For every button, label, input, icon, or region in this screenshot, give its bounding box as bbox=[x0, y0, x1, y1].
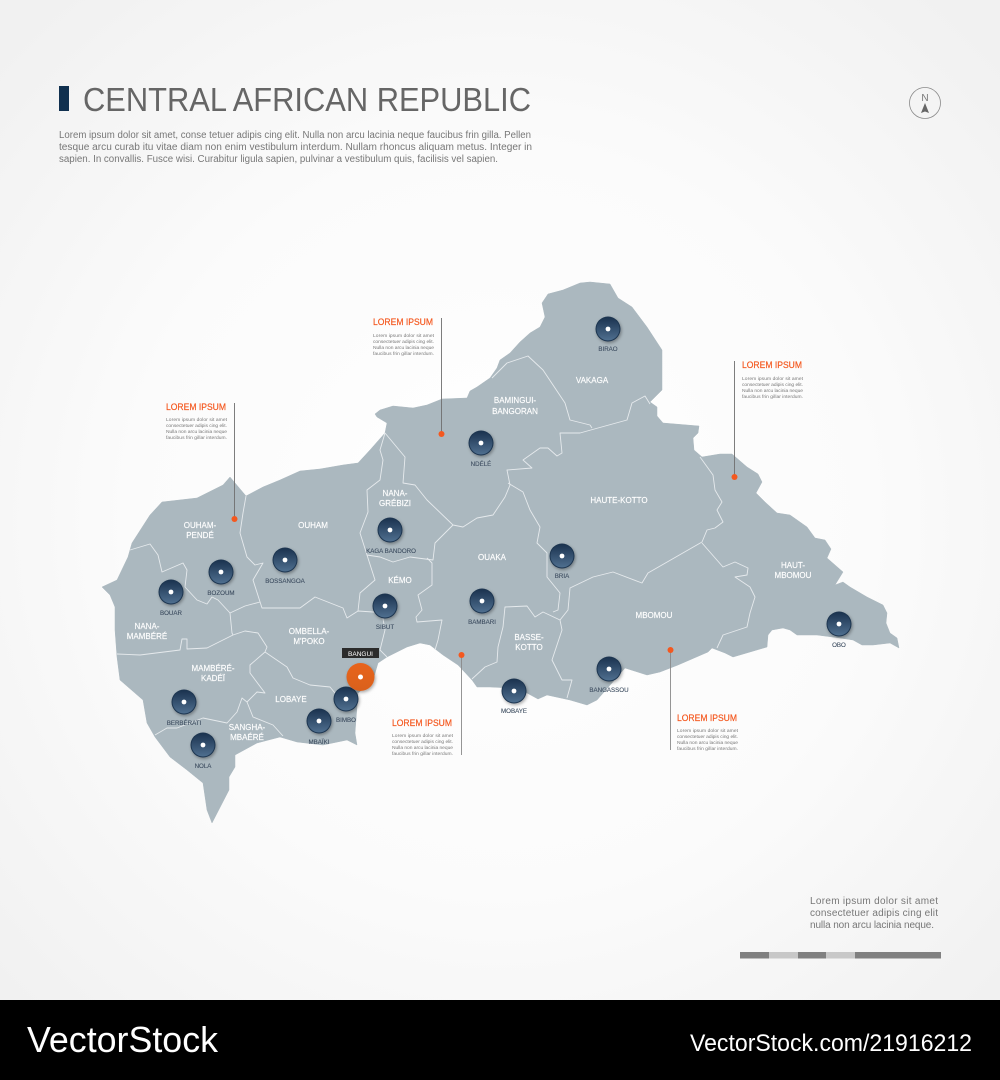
callout: west: faucibus frin gillar interdum. bbox=[166, 435, 227, 441]
capital label: Bangui: BANGUI bbox=[348, 651, 373, 658]
callout: north: LOREM IPSUM bbox=[373, 317, 433, 327]
callout: south east: faucibus frin gillar interdum. bbox=[677, 746, 738, 752]
callout: south east bbox=[668, 647, 739, 752]
callout: east: faucibus frin gillar interdum. bbox=[742, 394, 803, 400]
callout: north: consectetuer adipis cing elit. bbox=[373, 339, 434, 345]
city pins: BANGASSOU bbox=[589, 687, 629, 694]
city pins: SIBUT bbox=[376, 624, 394, 631]
footer id: VectorStock.com/21916212 bbox=[690, 1030, 972, 1057]
callout: south east: LOREM IPSUM bbox=[677, 713, 737, 723]
region labels: MBAÉRÉ bbox=[230, 733, 264, 742]
city pins: BIMBO bbox=[336, 717, 356, 724]
footer bar bbox=[0, 1000, 1000, 1080]
intro text bbox=[59, 130, 532, 165]
title marker bbox=[59, 86, 69, 111]
map of Central African Republic bbox=[102, 282, 899, 823]
region labels: MAMBÉRÉ bbox=[127, 632, 167, 641]
callout: east bbox=[732, 360, 804, 480]
bottom text: nulla non arcu lacinia neque. bbox=[810, 920, 934, 931]
region labels: BASSE- bbox=[514, 633, 544, 642]
city pins: MBAÏKI bbox=[309, 739, 330, 746]
intro text: sapien. In convallis. Fusce wisi. Curabitur ligula sapien, pulvinar a vestibulum quis, facilisis vel sapien. bbox=[59, 154, 498, 165]
region labels: NANA- bbox=[383, 489, 408, 498]
callout: west: Nulla non arcu lacinia neque bbox=[166, 429, 227, 435]
region labels: KADÉÏ bbox=[201, 674, 226, 683]
city pins: NOLA bbox=[195, 763, 212, 770]
callout: north: Lorem ipsum dolor sit amet bbox=[373, 333, 435, 339]
callout: east: LOREM IPSUM bbox=[742, 360, 802, 370]
region labels: BANGORAN bbox=[492, 407, 538, 416]
region labels: M'POKO bbox=[293, 637, 325, 646]
callout: east: Nulla non arcu lacinia neque bbox=[742, 388, 803, 394]
region labels: NANA- bbox=[135, 622, 160, 631]
callout: north: faucibus frin gillar interdum. bbox=[373, 351, 434, 357]
region labels: HAUTE-KOTTO bbox=[590, 496, 648, 505]
region labels: MAMBÉRÉ- bbox=[191, 664, 235, 673]
city pins: BAMBARI bbox=[468, 619, 496, 626]
city pins: KAGA BANDORO bbox=[366, 548, 416, 555]
region labels: SANGHA- bbox=[229, 723, 266, 732]
city pins: BERBÉRATI bbox=[167, 720, 202, 727]
region labels: GRÉBIZI bbox=[379, 499, 411, 508]
city pins bbox=[158, 316, 852, 770]
callout: south centre: faucibus frin gillar interdum. bbox=[392, 751, 453, 757]
callout: south centre: Nulla non arcu lacinia neque bbox=[392, 745, 453, 751]
city pins: MOBAYE bbox=[501, 708, 527, 715]
region labels: VAKAGA bbox=[576, 376, 609, 385]
city pins: BOZOUM bbox=[207, 590, 235, 597]
region labels: HAUT- bbox=[781, 561, 805, 570]
callout: west bbox=[166, 402, 238, 522]
callout: west: LOREM IPSUM bbox=[166, 402, 226, 412]
footer logo: VectorStock bbox=[27, 1019, 219, 1060]
callout: east: Lorem ipsum dolor sit amet bbox=[742, 376, 804, 382]
callout: south centre: LOREM IPSUM bbox=[392, 718, 452, 728]
scale bar bbox=[740, 952, 941, 958]
region labels: OUAKA bbox=[478, 553, 507, 562]
intro text: tesque arcu curab itu vitae diam non enim vestibulum interdum. Nullam rhoncus aliquam metus. Integer in bbox=[59, 142, 532, 153]
capital label: Bangui bbox=[342, 648, 379, 658]
bottom text: Lorem ipsum dolor sit amet bbox=[810, 896, 938, 907]
callout: south centre: Lorem ipsum dolor sit amet bbox=[392, 733, 454, 739]
icon: north compass: N bbox=[921, 93, 929, 104]
city pins: OBO bbox=[832, 642, 846, 649]
region borders bbox=[117, 356, 755, 736]
bottom text: consectetuer adipis cing elit bbox=[810, 908, 938, 919]
intro text: Lorem ipsum dolor sit amet, conse tetuer adipis cing elit. Nulla non arcu lacinia neque faucibus frin gilla. Pellen bbox=[59, 130, 531, 141]
region labels: BAMINGUI- bbox=[494, 396, 536, 405]
callout: east: consectetuer adipis cing elit. bbox=[742, 382, 803, 388]
icon: north compass bbox=[910, 88, 940, 118]
callout: north bbox=[373, 317, 444, 437]
callout: south centre bbox=[392, 652, 464, 757]
city pins: BRIA bbox=[555, 573, 570, 580]
callout: south east: Nulla non arcu lacinia neque bbox=[677, 740, 738, 746]
callout: west: Lorem ipsum dolor sit amet bbox=[166, 417, 228, 423]
region labels: KÉMO bbox=[388, 576, 412, 585]
region labels: PENDÉ bbox=[186, 531, 214, 540]
region labels: OUHAM- bbox=[184, 521, 217, 530]
region labels: OUHAM bbox=[298, 521, 328, 530]
title: CENTRAL AFRICAN REPUBLIC bbox=[83, 81, 531, 118]
callout: south east: consectetuer adipis cing elit. bbox=[677, 734, 738, 740]
callout: south centre: consectetuer adipis cing elit. bbox=[392, 739, 453, 745]
region labels: MBOMOU bbox=[636, 611, 673, 620]
map silhouette bbox=[102, 282, 899, 823]
city pins: BOUAR bbox=[160, 610, 183, 617]
region labels: LOBAYE bbox=[275, 695, 307, 704]
callout: south east: Lorem ipsum dolor sit amet bbox=[677, 728, 739, 734]
region labels: OMBELLA- bbox=[289, 627, 330, 636]
city pins: BIRAO bbox=[598, 346, 618, 353]
callout: west: consectetuer adipis cing elit. bbox=[166, 423, 227, 429]
city pins: NDÉLÉ bbox=[471, 461, 491, 468]
callout: north: Nulla non arcu lacinia neque bbox=[373, 345, 434, 351]
region labels: MBOMOU bbox=[775, 571, 812, 580]
region labels: KOTTO bbox=[515, 643, 543, 652]
capital marker bbox=[346, 663, 374, 691]
region labels bbox=[127, 376, 812, 742]
bottom text bbox=[810, 896, 938, 931]
city pins: BOSSANGOA bbox=[265, 578, 306, 585]
